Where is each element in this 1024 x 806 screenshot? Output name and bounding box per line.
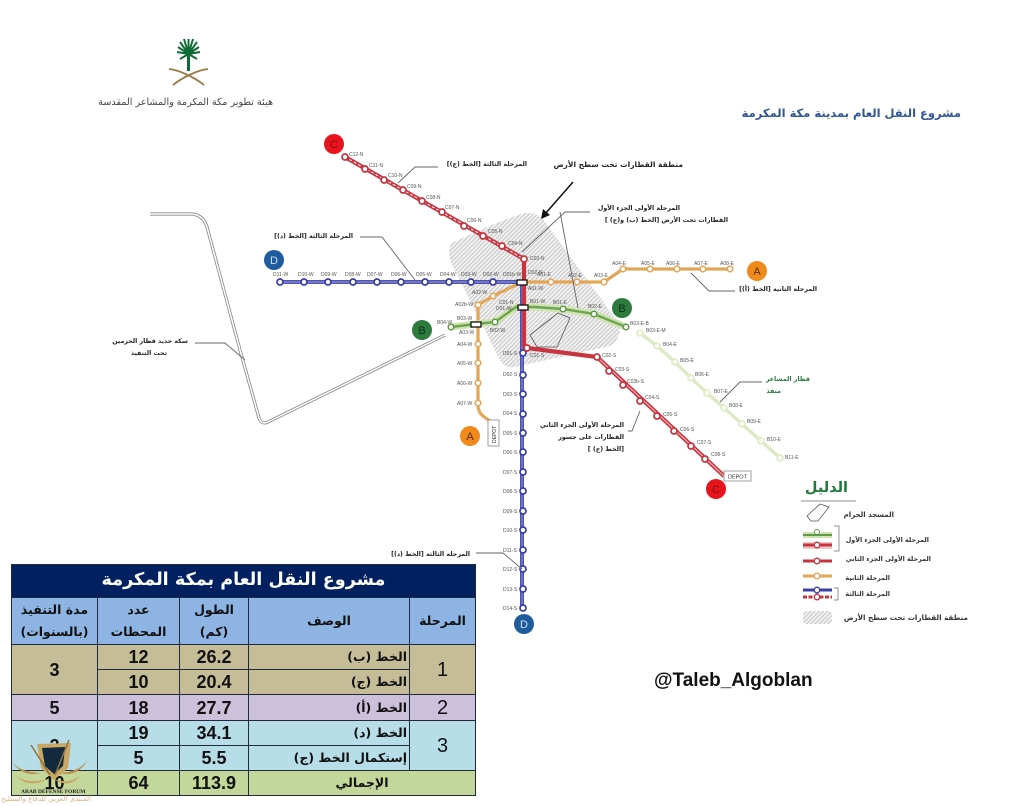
station labels: B03-E-M bbox=[646, 328, 666, 334]
line end markers: A bbox=[753, 266, 761, 278]
interchange boxes bbox=[471, 280, 528, 327]
station labels: A06-E bbox=[666, 261, 681, 267]
line end markers: A bbox=[466, 431, 474, 443]
arrow to underground zone bbox=[541, 182, 573, 219]
station labels: B11-E bbox=[785, 455, 799, 461]
main title: مشروع النقل العام بمدينة مكة المكرمة bbox=[742, 106, 961, 121]
summary table: الخط (ج) bbox=[351, 674, 407, 689]
map annotations: المرحلة الثالثة [الخط (ج)] bbox=[447, 161, 527, 168]
station labels: A02-W bbox=[472, 290, 488, 296]
depot boxes bbox=[488, 420, 751, 481]
line B bbox=[448, 306, 629, 330]
station labels: B09-E bbox=[747, 419, 762, 425]
watermark English text: ARAB DEFENSE FORUM bbox=[21, 789, 86, 795]
map annotations bbox=[112, 160, 817, 558]
station labels: D03-W bbox=[461, 272, 477, 278]
logo: palm and swords bbox=[169, 39, 208, 85]
summary table: الخط (ب) bbox=[347, 649, 407, 664]
summary table: عدد bbox=[127, 602, 150, 617]
map annotations: منطقة القطارات تحت سطح الأرض bbox=[553, 160, 683, 169]
legend bbox=[801, 480, 968, 624]
station labels: A06-W bbox=[457, 381, 473, 387]
station labels: D08-W bbox=[345, 272, 361, 278]
summary table: 20.4 bbox=[196, 672, 232, 692]
summary table: المحطات bbox=[111, 624, 166, 639]
station labels: C05-N bbox=[488, 229, 503, 235]
station labels: D10-S bbox=[503, 528, 518, 534]
station labels: A01-W bbox=[528, 286, 544, 292]
summary table: 3 bbox=[437, 734, 448, 756]
summary table: الخط (د) bbox=[353, 725, 407, 740]
summary table: 27.7 bbox=[196, 698, 232, 718]
station labels: A04-E bbox=[612, 261, 627, 267]
summary table: 34.1 bbox=[196, 723, 232, 743]
summary table: 1 bbox=[437, 658, 448, 680]
station labels: B06-E bbox=[695, 372, 710, 378]
station labels: C01-N bbox=[499, 300, 514, 306]
station labels: C12-N bbox=[349, 152, 364, 158]
summary table: الوصف bbox=[307, 613, 351, 628]
station labels: C03-N bbox=[530, 256, 545, 262]
station labels: B01-E bbox=[553, 300, 568, 306]
station labels: C09-N bbox=[407, 184, 422, 190]
station labels: B01-W bbox=[530, 299, 546, 305]
station labels: C07-N bbox=[445, 205, 460, 211]
summary table: 113.9 bbox=[192, 773, 236, 793]
summary table: 5.5 bbox=[201, 748, 227, 768]
author handle: @Taleb_Algoblan bbox=[654, 670, 813, 691]
map annotations: تحت التنفيذ bbox=[131, 350, 167, 357]
summary table: 26.2 bbox=[196, 647, 232, 667]
line end markers: B bbox=[618, 303, 626, 315]
summary table: 5 bbox=[133, 748, 144, 768]
summary table: الإجمالي bbox=[336, 775, 389, 790]
line end markers: D bbox=[270, 255, 278, 267]
line A bbox=[475, 266, 733, 421]
map annotations: المرحلة الأولى الجزء الثاني bbox=[540, 421, 624, 429]
station labels: C06-N bbox=[467, 218, 482, 224]
station labels bbox=[273, 152, 799, 612]
Mashaer line bbox=[637, 330, 783, 461]
map annotations: القطارات تحت الأرض [الخط (ب) و(ج) ] bbox=[605, 216, 728, 224]
depot boxes: DEPOT bbox=[728, 474, 748, 480]
station labels: D06-S bbox=[503, 450, 518, 456]
line end markers: B bbox=[418, 325, 426, 337]
line end markers: C bbox=[712, 484, 720, 496]
station labels: D11-W bbox=[273, 272, 288, 278]
station labels: B07-E bbox=[714, 389, 729, 395]
station labels: D06-W bbox=[391, 272, 407, 278]
legend: المرحلة الثالثة bbox=[845, 590, 890, 598]
summary table: الخط (أ) bbox=[356, 700, 407, 714]
station labels: A05-W bbox=[457, 361, 473, 367]
summary table: 12 bbox=[128, 647, 149, 667]
station labels: D07-W bbox=[367, 272, 383, 278]
watermark Arabic text: المنتدى العربي للدفاع والتسليح bbox=[1, 795, 91, 803]
summary table: إستكمال الخط (ج) bbox=[294, 750, 407, 765]
legend heading: الدليل bbox=[805, 480, 848, 496]
station labels: C08-S bbox=[711, 452, 726, 458]
legend: المرحلة الأولى الجزء الأول bbox=[846, 536, 929, 544]
station labels: B02-W bbox=[490, 328, 506, 334]
map annotations: منفذ bbox=[766, 388, 781, 395]
summary table: (كم) bbox=[200, 624, 228, 639]
station labels: D09-W bbox=[321, 272, 337, 278]
station labels: A01-E bbox=[537, 272, 552, 278]
station labels: C08-N bbox=[426, 195, 441, 201]
summary table: 2 bbox=[437, 696, 448, 718]
station labels: D13-S bbox=[503, 587, 518, 593]
station labels: D07-S bbox=[503, 470, 518, 476]
station labels: A04-W bbox=[457, 342, 473, 348]
station labels: A03-W bbox=[459, 330, 475, 336]
station labels: D01-W bbox=[496, 306, 512, 312]
station labels: C02-S bbox=[602, 353, 617, 359]
station labels: B04-E bbox=[663, 342, 678, 348]
station labels: D14-S bbox=[503, 606, 518, 612]
station labels: A02b-W bbox=[455, 302, 473, 308]
station labels: D01-S bbox=[503, 351, 518, 357]
map annotations: قطار المشاعر bbox=[765, 376, 810, 383]
summary table: (بالسنوات) bbox=[20, 624, 89, 639]
station labels: C05-S bbox=[663, 412, 678, 418]
summary table: 2 bbox=[49, 736, 60, 756]
map annotations: سكة حديد قطار الحرمين bbox=[112, 338, 188, 345]
station labels: D08-S bbox=[503, 489, 518, 495]
underground zone bbox=[449, 213, 620, 367]
station labels: D03-S bbox=[503, 392, 518, 398]
station labels: C11-N bbox=[369, 163, 383, 169]
station labels: C03b-S bbox=[627, 379, 645, 385]
station labels: A07-W bbox=[457, 401, 473, 407]
station labels: A03-E bbox=[594, 273, 609, 279]
legend: المسجد الحرام bbox=[844, 511, 894, 519]
station labels: C04-N bbox=[508, 241, 523, 247]
station labels: B02-E bbox=[588, 304, 603, 310]
summary table: مشروع النقل العام بمكة المكرمة bbox=[102, 570, 385, 590]
station labels: D05-W bbox=[416, 272, 432, 278]
station labels: B08-E bbox=[729, 403, 744, 409]
station labels: A07-E bbox=[694, 261, 709, 267]
summary table bbox=[11, 564, 476, 796]
station labels: C06-S bbox=[680, 427, 695, 433]
station labels: D09-S bbox=[503, 509, 518, 515]
station labels: D12-S bbox=[503, 567, 518, 573]
summary table: 3 bbox=[49, 660, 60, 680]
station labels: B10-E bbox=[767, 437, 782, 443]
station labels: B05-E bbox=[680, 358, 695, 364]
station labels: B03-E-B bbox=[630, 321, 650, 327]
summary table: 10 bbox=[44, 773, 65, 793]
summary table: مدة التنفيذ bbox=[21, 602, 88, 617]
map annotations: المرحلة الأولى الجزء الأول bbox=[598, 204, 680, 212]
summary table: الطول bbox=[194, 602, 234, 617]
legend: المرحلة الأولى الجزء الثاني bbox=[846, 555, 931, 563]
station labels: B04-W bbox=[437, 320, 453, 326]
station labels: B03-W bbox=[457, 316, 473, 322]
station labels: D02-N bbox=[528, 270, 543, 276]
summary table: 64 bbox=[128, 773, 149, 793]
station labels: C07-S bbox=[697, 440, 712, 446]
summary table: 18 bbox=[128, 698, 149, 718]
map annotations: [الخط (ج) ] bbox=[588, 446, 624, 453]
summary table: 5 bbox=[49, 698, 60, 718]
line end markers: C bbox=[330, 139, 338, 151]
station labels: D04-S bbox=[503, 411, 518, 417]
legend: منطقة القطارات تحت سطح الأرض bbox=[844, 613, 968, 622]
map annotations: المرحلة الثانية [الخط (أ)] bbox=[739, 284, 817, 293]
line C bbox=[342, 154, 724, 476]
station labels: D02-S bbox=[503, 372, 518, 378]
Haramain railway bbox=[150, 214, 445, 423]
grand mosque outline bbox=[530, 313, 570, 347]
station labels: D10-W bbox=[298, 272, 314, 278]
station labels: D01b-W bbox=[503, 272, 522, 278]
station labels: D02-W bbox=[483, 272, 499, 278]
station labels: D05-S bbox=[503, 431, 518, 437]
map annotations: المرحلة الثالثة [الخط (د)] bbox=[391, 551, 470, 558]
station labels: C03-S bbox=[615, 367, 630, 373]
station labels: A08-E bbox=[720, 261, 735, 267]
station labels: A05-E bbox=[641, 261, 656, 267]
summary table: 19 bbox=[128, 723, 149, 743]
line end markers: D bbox=[520, 619, 528, 631]
station labels: C01-S bbox=[530, 353, 545, 359]
station labels: C04-S bbox=[645, 395, 660, 401]
map annotations: القطارات على جسور bbox=[557, 434, 624, 441]
depot boxes: DEPOT bbox=[492, 426, 498, 443]
logo caption: هيئة تطوير مكة المكرمة والمشاعر المقدسة bbox=[98, 97, 273, 108]
station labels: A02-E bbox=[568, 273, 583, 279]
legend: المرحلة الثانية bbox=[845, 574, 890, 582]
line D bbox=[277, 279, 526, 611]
summary table: المرحلة bbox=[419, 613, 466, 628]
line end markers bbox=[264, 134, 767, 634]
summary table: 10 bbox=[128, 672, 149, 692]
leader lines bbox=[195, 167, 762, 569]
station labels: D11-S bbox=[503, 548, 517, 554]
station labels: C10-N bbox=[388, 173, 403, 179]
map annotations: المرحلة الثالثة [الخط (د)] bbox=[274, 233, 353, 240]
station labels: D04-W bbox=[440, 272, 456, 278]
